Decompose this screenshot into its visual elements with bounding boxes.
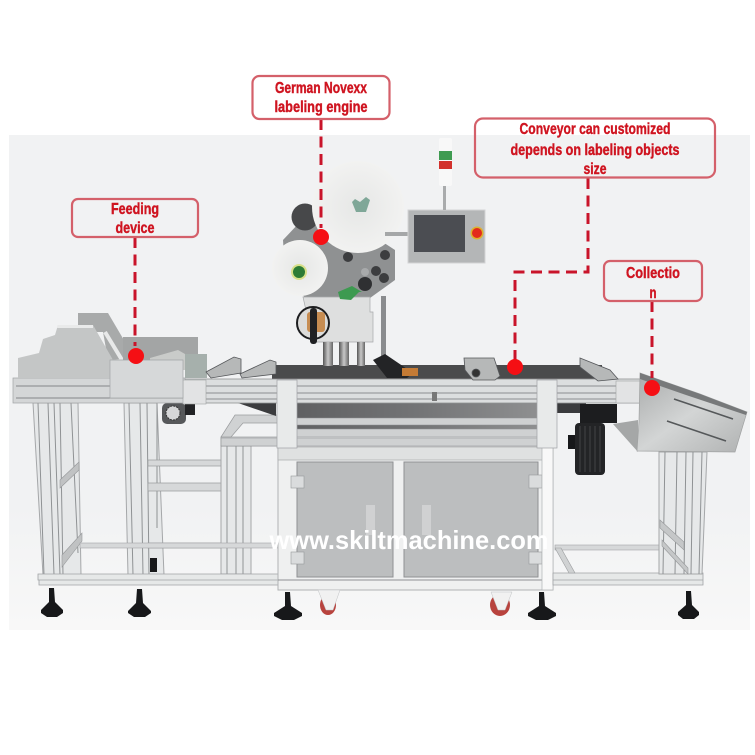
callout: Feeding device: Feeding: [111, 201, 159, 218]
support column: [381, 296, 386, 356]
machine illustration: [13, 138, 747, 620]
background panel: [9, 135, 750, 630]
feeder hopper: [18, 313, 207, 398]
large label roll: [312, 161, 404, 253]
fan cover: [162, 403, 195, 424]
conveyor guide rollers: [206, 357, 618, 381]
dark knob: [292, 204, 318, 230]
labeling engine: [272, 161, 418, 378]
roller cluster: [343, 250, 390, 283]
main conveyor beam: [13, 378, 640, 448]
motor: [556, 403, 617, 475]
callout: Feeding device: device: [116, 220, 155, 237]
control panel arm: [385, 232, 409, 236]
small label roll: [272, 240, 328, 296]
callout: Conveyor: [475, 118, 715, 375]
left support frame: [33, 403, 279, 585]
callout: Collection: Collectio: [626, 265, 680, 282]
callout: Collection: [604, 261, 702, 396]
callout: German Novexx labeling engine: labeling engine: [274, 99, 368, 116]
large roll hub: [352, 197, 370, 212]
callout: Collection: n: [650, 285, 656, 302]
collection tray: [613, 373, 747, 452]
hand wheel: [297, 307, 329, 339]
black lever: [373, 354, 413, 378]
signal tower: [439, 138, 452, 210]
control panel: [408, 210, 485, 263]
cabinet base: [278, 447, 553, 590]
conveyor belt: [272, 365, 602, 381]
callout: Conveyor: depends on labeling objects: [510, 142, 680, 159]
caster wheels: [318, 590, 512, 616]
callout: German Novexx labeling engine: German Novexx: [275, 80, 367, 97]
callout: Conveyor: size: [584, 161, 607, 178]
watermark: www.skiltmachine.com: [269, 525, 548, 555]
green lever: [338, 286, 362, 300]
levelling feet: [41, 558, 699, 620]
callout: German Novexx labeling engine: [252, 76, 390, 245]
callout: Conveyor: Conveyor can customized: [520, 121, 670, 138]
label plate: [283, 200, 395, 298]
small roll hub: [291, 264, 307, 280]
under-conveyor rails: [221, 403, 541, 446]
callout: Feeding device: [72, 199, 198, 364]
mounting block: [303, 297, 373, 342]
right support frame: [553, 452, 707, 585]
